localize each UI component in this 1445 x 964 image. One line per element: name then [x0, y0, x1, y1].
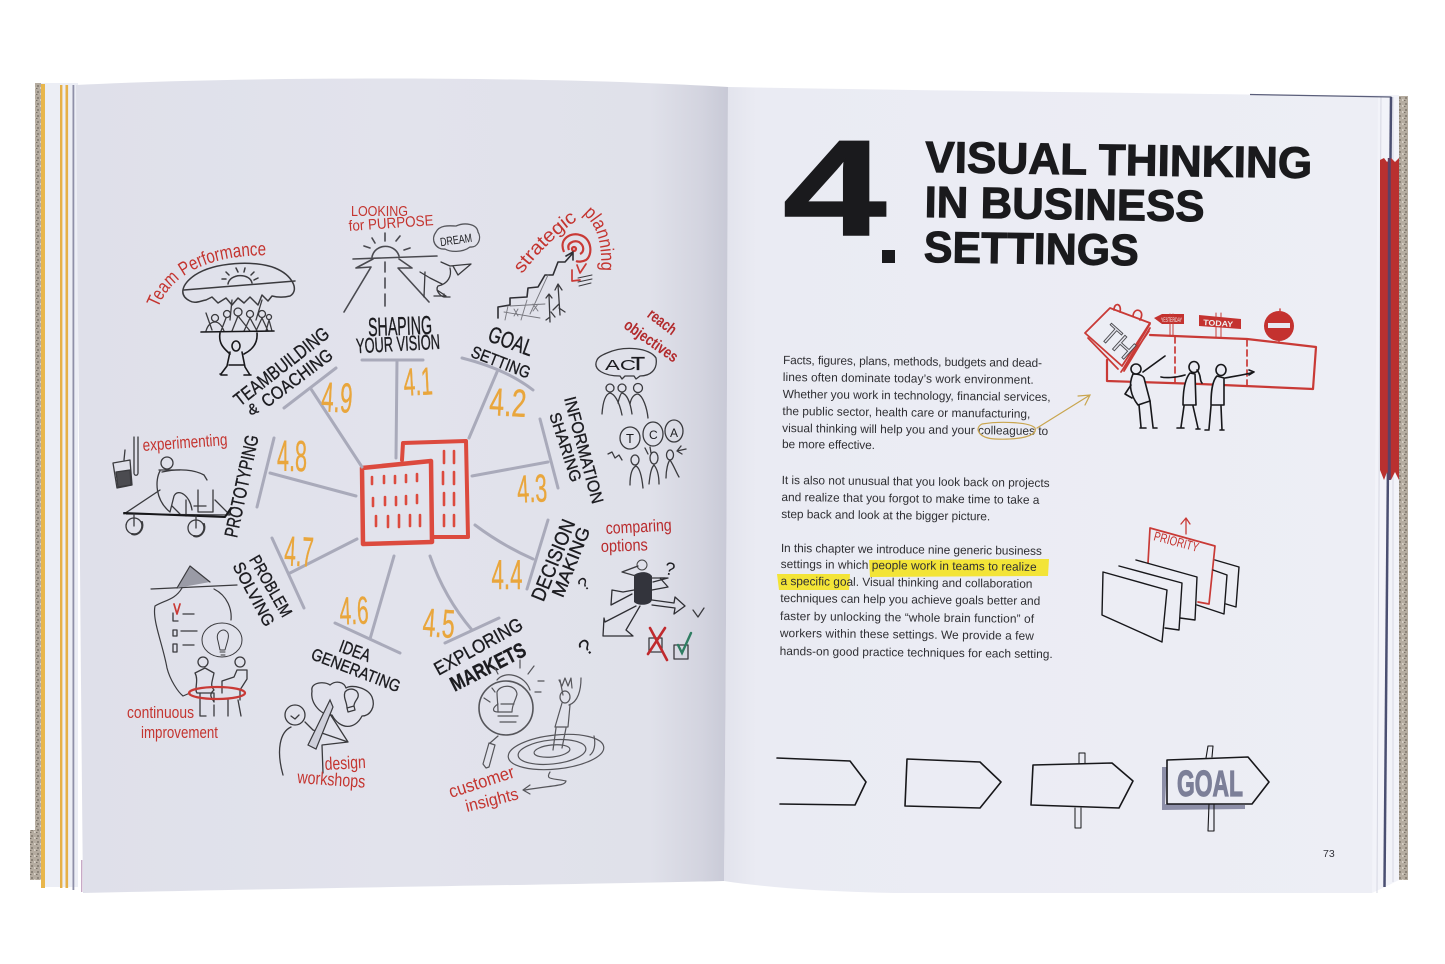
arrows: [546, 284, 565, 322]
spoke 4.4: [475, 516, 594, 604]
TCA bubbles and people: C: [649, 428, 658, 442]
dreamer on chair: [420, 262, 471, 297]
spoke 4.6: GENERATING: [309, 645, 403, 696]
tic tac toe grid: [504, 275, 548, 320]
spoke 4.4: DECISION: [528, 516, 580, 604]
body text: a specific goal. Visual thinking and collaboration: [780, 574, 1033, 591]
body text: the public sector, health care or manufacturing,: [782, 404, 1030, 421]
illustration: looking for purpose: [344, 203, 480, 312]
red and dark page edges: [1250, 94, 1399, 887]
three people: [602, 384, 648, 418]
chapter number: 4: [783, 113, 886, 264]
spoke 4.6: 4.6: [339, 590, 369, 633]
panel: right page: [724, 87, 1399, 893]
spoke 4.8: [221, 432, 356, 539]
person right: [1205, 364, 1254, 430]
spoke 4.3: INFORMATION: [560, 395, 607, 506]
spoke 4.7: 4.7: [283, 527, 315, 576]
calendar with TH: TH: [1095, 319, 1141, 365]
lightbulb: [344, 689, 358, 712]
direction arrows: [603, 578, 685, 636]
crossed box: [648, 628, 667, 660]
iceberg outline: [151, 566, 237, 696]
sign: yesterday: YESTERDAY: [1161, 318, 1182, 324]
spoke 4.2: 4.2: [488, 381, 528, 426]
question marks and tick marks: ?: [663, 558, 677, 580]
spoke 4.9: [230, 324, 362, 467]
caption: workshops: workshops: [296, 767, 366, 792]
caption: improvement: improvement: [141, 723, 218, 742]
person on cart: [124, 457, 231, 517]
sign: yesterday: [1154, 314, 1184, 336]
illustration: goal sign: [1162, 746, 1269, 831]
illustration: arrow sign step 2: [905, 759, 1001, 808]
body text: hands-on good practice techniques for each setting.: [780, 644, 1053, 661]
caption: Team Performance: [146, 245, 266, 304]
target: [563, 234, 590, 262]
spoke 4.2: GOAL: [485, 321, 537, 361]
chapter title: [923, 133, 1313, 278]
question marks and tick marks: [573, 558, 704, 661]
yellow highlights: [777, 559, 1049, 590]
book edge: left cover and page stack: [30, 83, 82, 892]
caption: reach: reach: [644, 306, 680, 339]
strong person holding platform: [201, 331, 274, 375]
body text: settings in which people work in teams to realize: [781, 557, 1037, 574]
caption: continuous: continuous: [127, 703, 194, 722]
body text: techniques can help you achieve goals better and: [780, 591, 1040, 608]
illustration: arrow sign step 3: [1031, 753, 1133, 828]
red priority sheet: [1148, 528, 1215, 604]
lab glassware: [113, 437, 138, 488]
spoke 4.3: SHARING: [545, 411, 584, 484]
spoke 4.5: MARKETS: [446, 639, 530, 696]
spoke 4.1: YOUR VISION: [355, 331, 441, 358]
caption paths: [522, 205, 601, 295]
illustration: priority sheets: PRIORITY: [1152, 528, 1201, 555]
question marks and tick marks: ?: [573, 634, 599, 661]
spoke 4.9: &: [246, 400, 261, 419]
cloud with sun: [183, 263, 295, 305]
magnifying glass with bulb: [479, 660, 544, 768]
puzzle people: [195, 657, 247, 716]
page background: [724, 87, 1378, 893]
timeline dashed markers: [1175, 337, 1247, 385]
body text: be more effective.: [782, 437, 875, 452]
body text: and realize that you forgot to make time to take a: [781, 490, 1040, 507]
chapter title: VISUAL THINKING: [925, 133, 1313, 188]
illustration: design workshops: [280, 682, 373, 792]
body text: lines often dominate today’s work environment.: [783, 370, 1034, 387]
spoke 4.7: SOLVING: [229, 559, 278, 630]
body text: step back and look at the bigger picture.: [781, 507, 990, 523]
caption: strategic: strategic: [516, 214, 576, 272]
illustration: team performance: [146, 245, 296, 376]
spoke 4.6: IDEA: [337, 636, 373, 666]
red checklist: [572, 264, 586, 281]
sign: today: [1199, 313, 1241, 337]
illustration: comparing options: [573, 516, 704, 661]
stairs: [498, 252, 573, 318]
illustration: goal sign: GOAL: [1177, 763, 1243, 804]
black sheets: [1102, 560, 1239, 642]
chapter title: IN BUSINESS: [924, 178, 1205, 231]
body text: Whether you work in technology, financial services,: [783, 387, 1051, 404]
body text: It is also not unusual that you look back on projects: [782, 473, 1050, 490]
body text: workers within these settings. We provide a few: [779, 626, 1034, 643]
caption: customer: customer: [446, 762, 517, 802]
spoke 4.5: [421, 556, 530, 696]
caption: LOOKING: [351, 203, 408, 220]
TCA bubbles and people: [608, 420, 686, 488]
illustration: timeline with calendar and people: [1085, 305, 1316, 430]
body text: Facts, figures, plans, methods, budgets and dead-: [783, 353, 1042, 370]
callout: colleagues circled with arrow: [978, 395, 1090, 439]
panel: left page: [76, 78, 728, 893]
person on target: [506, 678, 606, 794]
spoke 4.9: TEAMBUILDING: [230, 324, 334, 411]
illustration: priority sheets: [1102, 518, 1239, 642]
checklist: [173, 604, 197, 652]
illustration: strategic planning: [497, 207, 614, 323]
ACT speech bubble: AC: [605, 357, 636, 374]
caption: insights: insights: [463, 784, 520, 816]
dream bubble: DREAM: [439, 231, 473, 249]
person left: [1125, 356, 1165, 428]
caption path: [158, 255, 290, 308]
ACT speech bubble: [596, 348, 656, 379]
spoke 4.3: [472, 395, 607, 512]
spoke 4.9: 4.9: [320, 373, 354, 422]
spoke 4.2: SETTING: [468, 342, 533, 382]
book edge: right speckled cover and page stack: [1360, 95, 1408, 893]
caption: planning: planning: [581, 207, 614, 270]
person middle: [1161, 362, 1202, 429]
illustration: customer insights: [446, 660, 606, 816]
red hoop: [189, 687, 245, 699]
sign: today: TODAY: [1203, 318, 1234, 329]
caption: options: options: [600, 535, 648, 556]
spoke 4.1: SHAPING: [367, 310, 433, 342]
caption: objectives: objectives: [620, 317, 681, 366]
spoke 4.9: COACHING: [257, 345, 337, 411]
spoke 4.7: [229, 527, 357, 630]
crowd of people: [206, 300, 272, 331]
up arrow: [1181, 518, 1190, 534]
illustration: reach objectives: [596, 306, 686, 488]
body text: faster by unlocking the “whole brain function” of: [780, 609, 1035, 626]
page background: [76, 78, 728, 893]
spoke 4.5: EXPLORING: [431, 614, 527, 680]
lightbulb idea: [202, 623, 242, 657]
businessman: [622, 560, 665, 605]
cart wheels: [126, 514, 204, 536]
spoke 4.5: 4.5: [421, 601, 456, 647]
building hub icon: [362, 441, 468, 544]
spoke 4.4: 4.4: [492, 551, 522, 598]
body text: In this chapter we introduce nine generic business: [781, 541, 1042, 558]
spoke 4.2: [462, 321, 537, 438]
sign: no entry: [1264, 309, 1294, 343]
spoke 4.3: 4.3: [516, 467, 548, 512]
illustration: looking for purpose: for PURPOSE: [348, 212, 434, 235]
TCA bubbles and people: T: [626, 431, 634, 446]
spoke 4.1: 4.1: [402, 360, 434, 405]
chapter title: SETTINGS: [923, 223, 1139, 275]
lightbulb cloud: [312, 682, 373, 726]
illustration: continuous improvement: [127, 566, 247, 742]
spoke 4.8: 4.8: [277, 432, 307, 481]
checked box: [674, 633, 691, 659]
TCA bubbles and people: A: [670, 426, 678, 440]
body text: visual thinking will help you and your colleagues to: [782, 421, 1049, 438]
body text: [779, 353, 1056, 661]
caption: design: design: [324, 752, 366, 774]
road and sun: [344, 233, 437, 312]
ACT speech bubble: T: [631, 354, 645, 374]
spoke 4.4: MAKING: [548, 524, 594, 600]
timeline bar: [1107, 335, 1316, 389]
calendar with TH: [1085, 305, 1150, 372]
spoke 4.1: [355, 310, 441, 458]
page number: 73: [1323, 848, 1335, 860]
spoke 4.6: [309, 556, 403, 696]
caption: experimenting: [142, 430, 228, 455]
question marks and tick marks: ?: [574, 573, 594, 595]
spoke 4.8: PROTOTYPING: [221, 433, 264, 539]
person with pencil: [280, 700, 348, 775]
illustration: experimenting: [113, 430, 231, 536]
spoke 4.7: PROBLEM: [245, 552, 296, 620]
caption: comparing: comparing: [605, 516, 672, 538]
illustration: arrow sign step 1: [777, 758, 866, 805]
